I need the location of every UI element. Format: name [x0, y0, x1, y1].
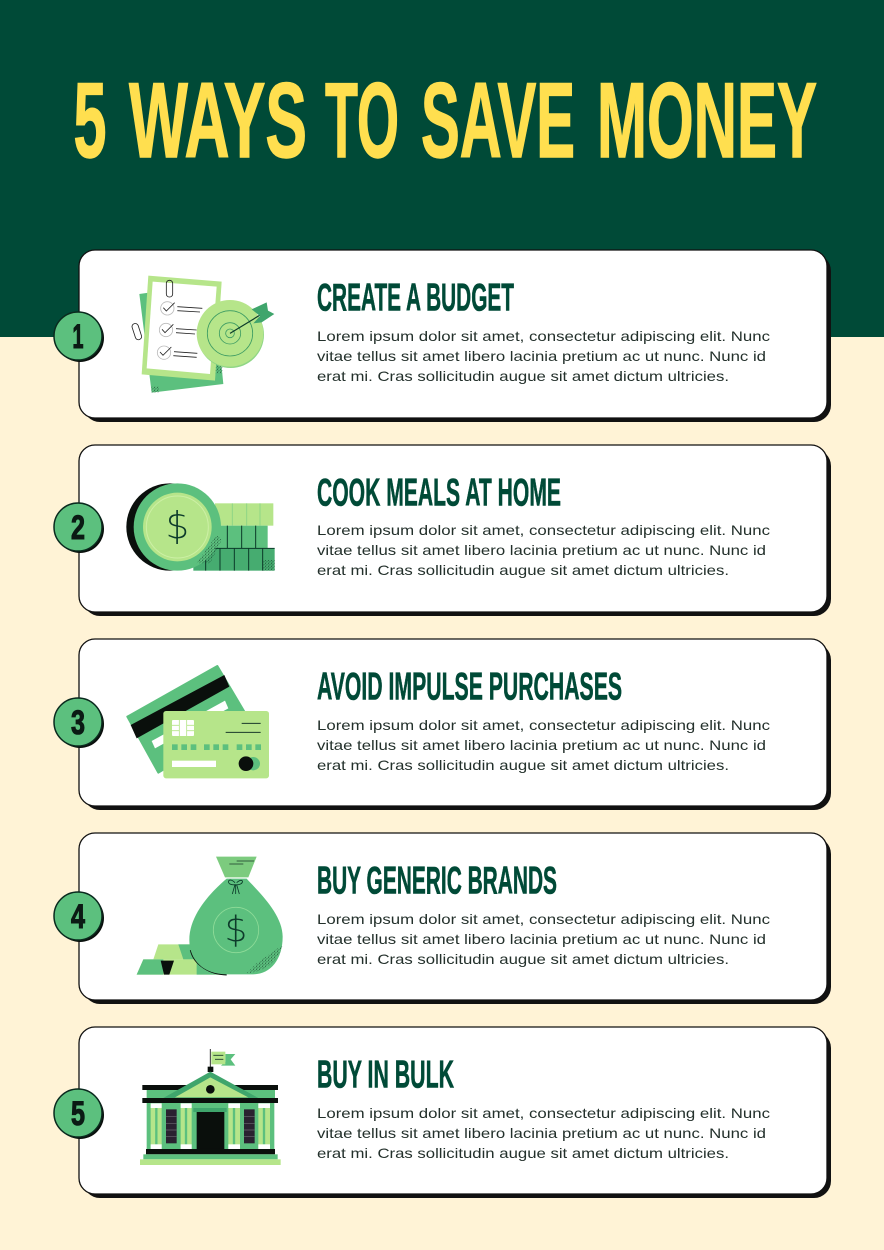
description: Lorem ipsum dolor sit amet, consectetur adipiscing elit. Nunc [317, 522, 770, 538]
title: TO [325, 60, 399, 180]
header band [0, 0, 884, 337]
title [74, 60, 817, 180]
description [317, 1105, 770, 1161]
description: Lorem ipsum dolor sit amet, consectetur adipiscing elit. Nunc [317, 717, 770, 733]
number badge 1: 1 [72, 318, 84, 356]
description: vitae tellus sit amet libero lacinia pretium ac ut nunc. Nunc id [317, 1125, 766, 1141]
title: SAVE [421, 60, 575, 180]
description: erat mi. Cras sollicitudin augue sit amet dictum ultricies. [317, 1145, 729, 1161]
description: vitae tellus sit amet libero lacinia pretium ac ut nunc. Nunc id [317, 542, 766, 558]
description: erat mi. Cras sollicitudin augue sit amet dictum ultricies. [317, 368, 729, 384]
description [317, 328, 770, 384]
number badge 3: 3 [71, 704, 85, 742]
description: erat mi. Cras sollicitudin augue sit amet dictum ultricies. [317, 562, 729, 578]
icon: credit cards [127, 666, 269, 778]
description: Lorem ipsum dolor sit amet, consectetur adipiscing elit. Nunc [317, 911, 770, 927]
heading: AVOID IMPULSE PURCHASES [317, 666, 622, 708]
description: vitae tellus sit amet libero lacinia pretium ac ut nunc. Nunc id [317, 931, 766, 947]
heading: COOK MEALS AT HOME [317, 472, 561, 514]
number badge 3 [54, 698, 104, 748]
number badge 4 [54, 892, 104, 942]
icon: checklist and target [131, 276, 274, 393]
heading: CREATE A BUDGET [317, 276, 514, 320]
description [317, 522, 770, 578]
number badge 4: 4 [71, 898, 85, 936]
description: erat mi. Cras sollicitudin augue sit amet dictum ultricies. [317, 951, 729, 967]
title: WAYS [129, 60, 307, 180]
number badge 5: 5 [71, 1095, 85, 1133]
heading: BUY GENERIC BRANDS [317, 860, 557, 902]
heading: BUY IN BULK [317, 1054, 454, 1096]
number badge 5 [54, 1089, 104, 1139]
description [317, 911, 770, 967]
description: vitae tellus sit amet libero lacinia pretium ac ut nunc. Nunc id [317, 348, 766, 364]
icon: coin and stacks [126, 483, 275, 571]
panel: buy in bulk [54, 1027, 831, 1198]
icon: bank building [140, 1049, 281, 1165]
description: Lorem ipsum dolor sit amet, consectetur adipiscing elit. Nunc [317, 328, 770, 344]
description [317, 717, 770, 773]
panel: buy generic brands [54, 833, 831, 1004]
panel: avoid impulse purchases [54, 639, 831, 810]
icon: money bag and gold bars: $ [225, 910, 247, 951]
icon: coin and stacks: $ [165, 503, 189, 547]
description: vitae tellus sit amet libero lacinia pretium ac ut nunc. Nunc id [317, 737, 766, 753]
number badge 1 [54, 312, 104, 362]
number badge 2: 2 [71, 509, 85, 547]
panel: cook meals at home [54, 445, 831, 616]
description: Lorem ipsum dolor sit amet, consectetur adipiscing elit. Nunc [317, 1105, 770, 1121]
description: erat mi. Cras sollicitudin augue sit amet dictum ultricies. [317, 757, 729, 773]
number badge 2 [54, 503, 104, 553]
icon: money bag and gold bars [137, 857, 283, 975]
panel: create a budget [54, 250, 831, 422]
title: 5 [74, 60, 106, 180]
